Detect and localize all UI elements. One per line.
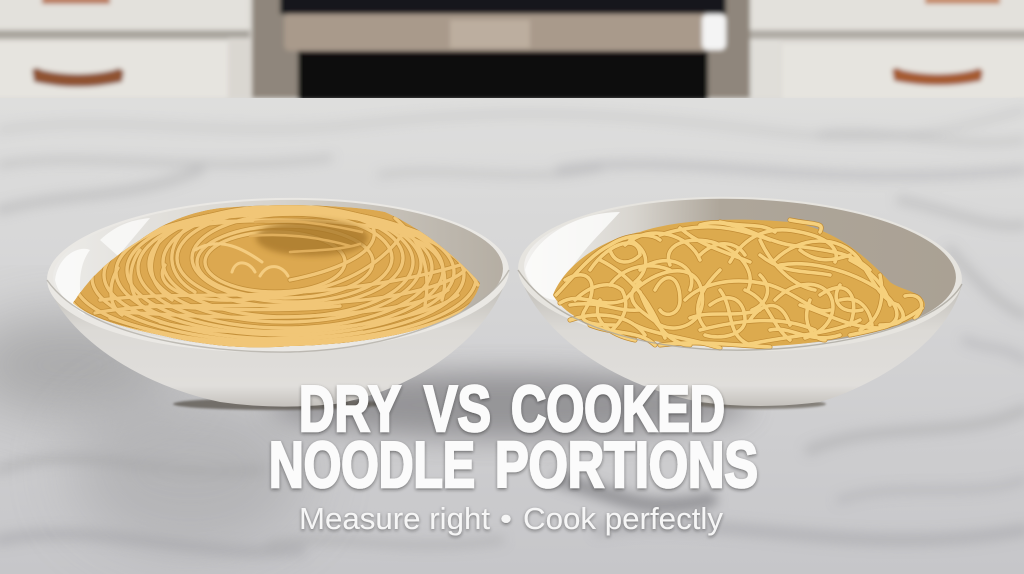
title line 1: VS	[424, 372, 491, 445]
subtitle: •	[500, 501, 512, 536]
left bowl with dry noodles	[45, 193, 511, 407]
dry noodle mass	[73, 205, 485, 347]
bowl body: right	[518, 270, 962, 406]
title	[269, 372, 758, 501]
bowl shadows on the counter	[0, 315, 826, 550]
bowl front rim line: right	[518, 270, 962, 350]
title line 2: NOODLE	[269, 428, 475, 501]
bowl rim: left	[45, 193, 511, 357]
subtitle: Measure right	[299, 501, 490, 536]
subtitle: Cook perfectly	[523, 501, 724, 536]
title line 1: COOKED	[511, 372, 725, 445]
title line 1	[299, 372, 725, 445]
bowl body: left	[47, 270, 509, 407]
bowl front rim line: left	[47, 270, 509, 352]
bowl rim: right	[516, 191, 964, 357]
title line 1: DRY	[299, 372, 401, 445]
subtitle	[299, 501, 724, 536]
title line 2	[269, 428, 758, 501]
cooked noodle mass	[553, 220, 925, 348]
background: kitchen cabinets and oven	[0, 0, 1024, 100]
right bowl with cooked noodles	[516, 191, 964, 406]
title line 2: PORTIONS	[495, 428, 758, 501]
